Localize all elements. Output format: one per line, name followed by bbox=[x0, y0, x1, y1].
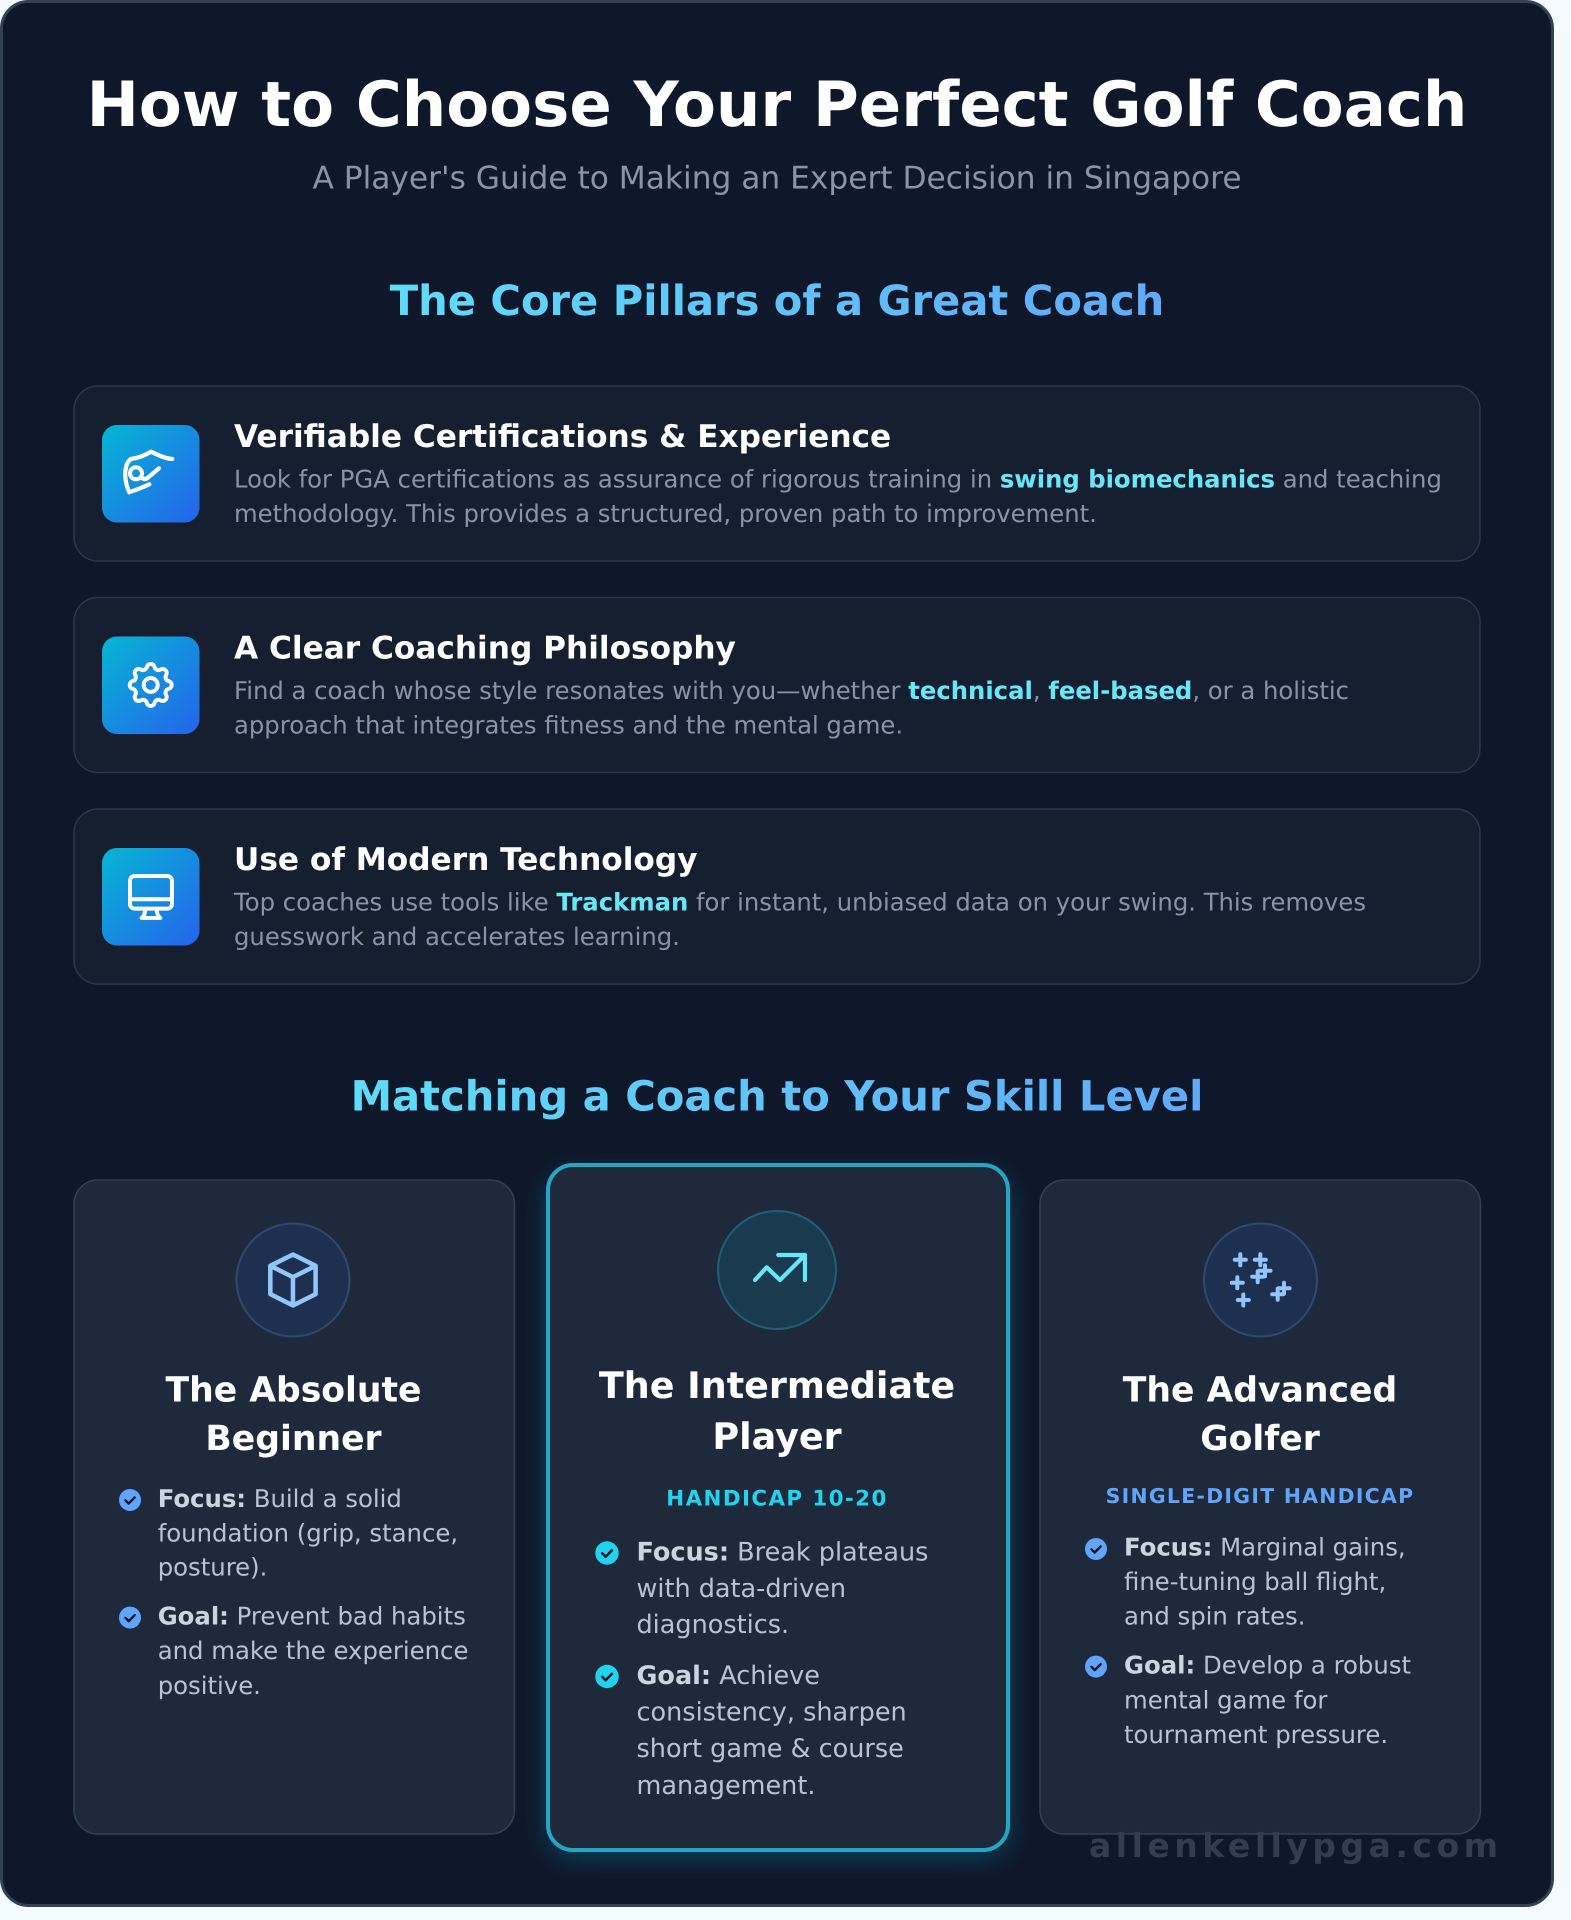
handicap label: HANDICAP 10-20 bbox=[666, 1487, 888, 1512]
focus item bbox=[1085, 1533, 1406, 1630]
icon: trending up bbox=[718, 1211, 836, 1329]
focus item: foundation (grip, stance, bbox=[158, 1518, 458, 1547]
subtitle: A Player's Guide to Making an Expert Decision in Singapore bbox=[312, 160, 1242, 196]
pillar text: approach that integrates fitness and the mental game. bbox=[234, 710, 903, 740]
focus item: fine-tuning ball flight, bbox=[1124, 1567, 1386, 1596]
card title: The Absolute bbox=[166, 1370, 422, 1410]
focus item: posture). bbox=[158, 1553, 267, 1582]
card title: The Intermediate bbox=[599, 1364, 955, 1407]
card title: Beginner bbox=[205, 1419, 382, 1459]
pillar title: A Clear Coaching Philosophy bbox=[234, 630, 736, 666]
goal item: Goal: Prevent bad habits bbox=[158, 1602, 466, 1631]
goal item: consistency, sharpen bbox=[636, 1698, 907, 1728]
icon: cube bbox=[236, 1224, 350, 1336]
goal item: management. bbox=[636, 1771, 815, 1801]
focus item: and spin rates. bbox=[1124, 1601, 1305, 1630]
goal item: Goal: Achieve bbox=[636, 1661, 820, 1691]
icon: sparkles bbox=[1204, 1224, 1317, 1336]
focus item: with data-driven bbox=[636, 1574, 846, 1604]
goal item: mental game for bbox=[1124, 1685, 1328, 1714]
focus item bbox=[595, 1538, 928, 1640]
focus item: Focus: Break plateaus bbox=[636, 1538, 928, 1568]
icon: certification badge bbox=[102, 425, 200, 522]
glow: intermediate card bbox=[548, 1175, 1008, 1857]
pillar title: Use of Modern Technology bbox=[234, 842, 698, 878]
pillar text: guesswork and accelerates learning. bbox=[234, 922, 680, 951]
handicap label: SINGLE-DIGIT HANDICAP bbox=[1106, 1484, 1414, 1508]
panel: technology bbox=[74, 809, 1480, 984]
goal item: Goal: Develop a robust bbox=[1124, 1650, 1411, 1679]
card title: Golfer bbox=[1200, 1419, 1320, 1459]
goal item bbox=[119, 1602, 468, 1700]
pillar text: methodology. This provides a structured, proven path to improvement. bbox=[234, 499, 1097, 528]
focus item: diagnostics. bbox=[636, 1610, 789, 1640]
panel: philosophy bbox=[74, 598, 1480, 772]
goal item: and make the experience bbox=[158, 1636, 468, 1665]
heading: core pillars: The Core Pillars of a Great Coach bbox=[390, 276, 1164, 325]
icon: gear bbox=[102, 636, 200, 734]
card title: The Advanced bbox=[1123, 1370, 1397, 1410]
pillar text: Look for PGA certifications as assurance of rigorous training in swing biomechanics and teaching bbox=[234, 464, 1442, 494]
goal item: tournament pressure. bbox=[1124, 1720, 1388, 1749]
goal item: short game & course bbox=[636, 1734, 904, 1764]
panel: absolute beginner bbox=[74, 1180, 514, 1834]
panel: certifications bbox=[74, 386, 1480, 561]
goal item: positive. bbox=[158, 1671, 261, 1700]
icon: monitor bbox=[102, 848, 200, 946]
title: How to Choose Your Perfect Golf Coach bbox=[87, 68, 1467, 141]
goal item bbox=[595, 1661, 907, 1801]
pillar title: Verifiable Certifications & Experience bbox=[234, 419, 891, 455]
focus item: Focus: Build a solid bbox=[158, 1484, 402, 1513]
card title: Player bbox=[712, 1415, 842, 1458]
focus item: Focus: Marginal gains, bbox=[1124, 1533, 1406, 1562]
panel: advanced golfer bbox=[1040, 1180, 1480, 1834]
panel: intermediate player bbox=[548, 1165, 1008, 1850]
goal item bbox=[1085, 1650, 1411, 1749]
focus item bbox=[119, 1484, 458, 1582]
watermark: allenkellypga.com bbox=[1089, 1826, 1503, 1865]
heading: skill level: Matching a Coach to Your Skill Level bbox=[351, 1072, 1203, 1120]
pillar text: Top coaches use tools like Trackman for instant, unbiased data on your swing. This removes bbox=[234, 888, 1366, 916]
pillar text: Find a coach whose style resonates with you—whether technical, feel-based, or a holistic bbox=[234, 676, 1349, 705]
